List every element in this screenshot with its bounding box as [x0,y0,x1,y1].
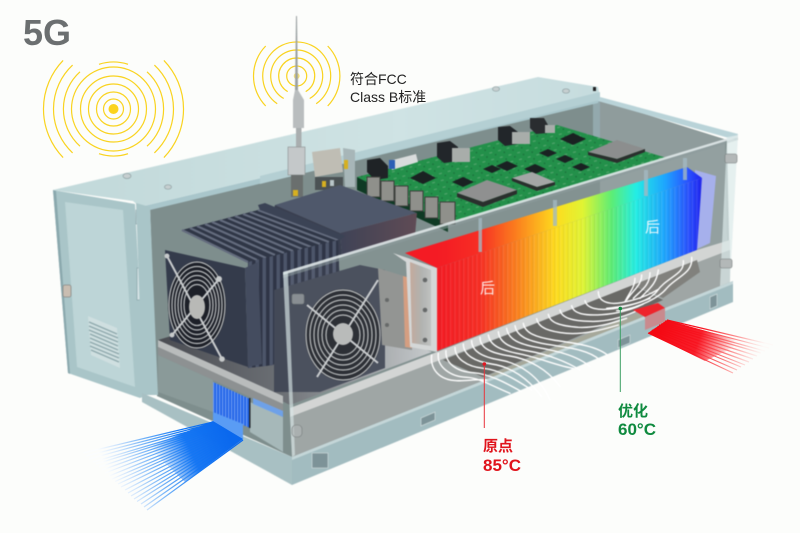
back plate [695,170,716,250]
support posts [478,158,687,252]
cabinet base [142,281,733,485]
door vent [88,316,120,368]
label: original 85°C: 原点 [483,437,513,455]
red air outlet duct [633,303,665,330]
antenna bracket [312,148,343,177]
dark floor band [443,285,663,377]
red air flow rays [648,320,773,373]
blue glow strip [253,398,283,417]
label: optimised 60°C: 60°C [618,420,656,439]
metal shelf [158,300,432,452]
white airflow lines [431,257,692,400]
fan 2 [274,265,385,392]
cabinet lid [53,77,738,395]
fan 1 [164,250,262,367]
blue air intake duct [213,382,250,440]
base slots [312,294,717,468]
door latch [63,285,71,297]
antenna [288,16,355,197]
label: original 85°C [483,437,521,475]
capacitor row [367,177,455,224]
glass front panel [283,135,738,457]
heat sink logo right: 后 [645,219,660,236]
label: FCC compliance: 符合FCC [350,71,407,87]
door hinges [136,210,140,300]
heat sink fins top [182,203,345,368]
heat sink logo left: 后 [480,280,495,297]
side door [53,190,145,398]
label: FCC compliance: Class B标准 [350,89,426,105]
metal bracket [378,253,437,352]
silver chip heatsinks [457,140,645,207]
PCB chips [410,133,590,187]
lower compartment [158,355,213,412]
leader: optimised temperature [618,307,622,392]
icon: large 5G signal rings [43,60,184,158]
label: optimised 60°C [618,402,656,439]
heat sink rainbow [405,158,716,351]
PCB board [357,118,667,232]
dark power box [270,185,417,256]
title: 5G: 5G [23,12,71,53]
icon: antenna signal rings [254,42,340,106]
label: original 85°C: 85°C [483,456,521,475]
glass clamps [292,154,737,437]
cabinet illustration [53,16,738,485]
label: FCC compliance [350,71,426,105]
connectors [367,118,555,180]
cabinet interior [150,100,730,457]
label: optimised 60°C: 优化 [618,402,648,420]
blue air flow rays [83,421,243,510]
leader: original temperature [482,362,486,428]
lid screws [123,87,570,189]
front shelf and floor [290,240,730,457]
